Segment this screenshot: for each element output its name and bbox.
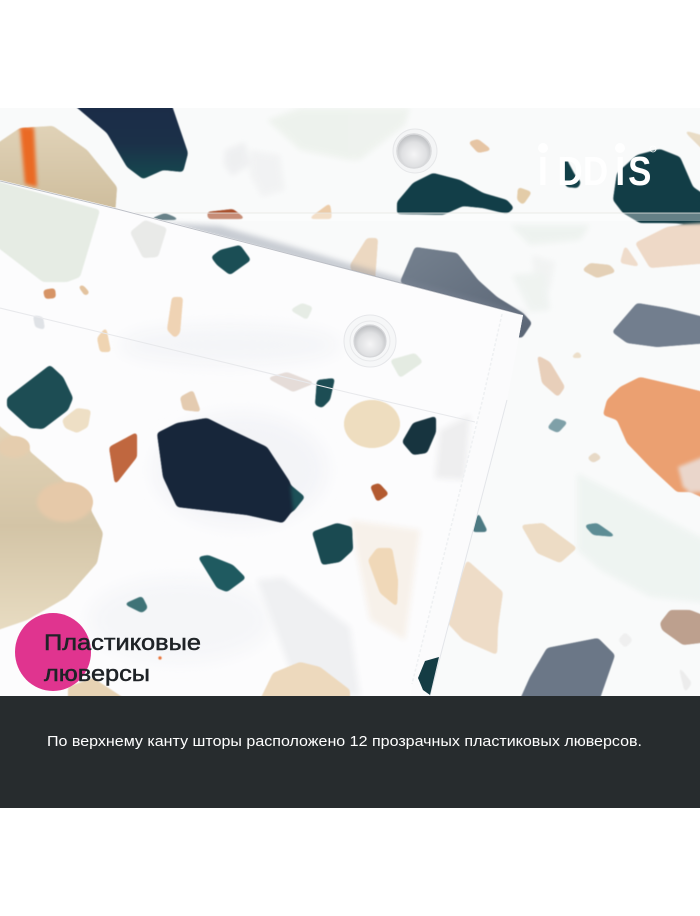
shape: teal lower [198, 555, 246, 592]
shape: grey chip [680, 670, 691, 690]
top hem line [135, 212, 700, 221]
flap: folded curtain corner [0, 180, 523, 704]
shape: round beige [344, 400, 400, 448]
shape: teal behind navy [262, 445, 305, 512]
shape: teal chip [584, 523, 617, 537]
upper layer: terrazzo shapes [0, 100, 700, 704]
shape: slate blob behind corner [400, 247, 532, 338]
shape: teal left blob [7, 365, 73, 429]
shape: peach shard [537, 355, 565, 397]
stitch line on flap [0, 308, 475, 422]
shape: navy chip [402, 416, 436, 455]
shape: grey chip [620, 634, 631, 646]
shape: peach spot [0, 436, 30, 458]
shape: orange large [603, 377, 700, 500]
shape: orange strip [20, 128, 37, 187]
flap: terrazzo shapes [0, 180, 436, 704]
shape: tan chip [469, 139, 490, 153]
shape: teal chip at hem [473, 514, 488, 533]
logo: IDDIS: IDDIS [538, 149, 651, 195]
shape: tan chip top right [686, 131, 700, 148]
shape: teal small [124, 596, 148, 613]
shape: beige big [445, 560, 503, 655]
shape: teal blob upper centre [397, 173, 514, 215]
upper layer: faint background shapes [224, 108, 700, 603]
flap edge line [0, 181, 523, 315]
shape: orange dot [158, 656, 162, 660]
shape: pale teal chip [547, 418, 568, 433]
heading: plastic grommets: Пластиковые [44, 630, 201, 655]
hem on flap side [410, 313, 523, 696]
fold shadow [168, 220, 526, 315]
shape: peach drop [368, 548, 398, 607]
shape: peach shard behind flap [350, 238, 378, 276]
shape: peach spots [37, 482, 93, 522]
shape: navy sliver [153, 213, 177, 221]
shape: pale mint [290, 303, 313, 320]
shape: beige round left [62, 408, 91, 433]
shape: beige leaf [521, 523, 577, 563]
shape: big tan left [0, 420, 103, 632]
shape: rust chip [207, 209, 246, 219]
shape: rust shard [109, 432, 137, 485]
shape: tan long [167, 297, 183, 338]
shape: slate blob bottom [520, 638, 615, 696]
shape: tan chip [180, 390, 201, 412]
shape: teal blob behind logo [564, 162, 581, 189]
shape: tan bottom left [68, 678, 133, 704]
shape: teal blob [211, 245, 251, 275]
shape: teal chip [315, 378, 335, 408]
shape: tiny beige [588, 452, 601, 463]
flap: pale shapes [257, 415, 470, 696]
shape: tan large top left [0, 126, 117, 214]
shape: pale grey [130, 220, 167, 258]
shape: pale mint near grommet [390, 353, 423, 378]
shape: rust tiny [43, 288, 56, 299]
grommet: on flap [344, 315, 396, 367]
grommet: upper [393, 129, 437, 173]
photo: shower curtain fabric [0, 100, 700, 704]
shape: dark teal under fold [273, 252, 320, 268]
shape: rust chip [370, 483, 389, 502]
heading: plastic grommets: люверсы [44, 661, 150, 686]
infographic canvas [0, 108, 700, 808]
shape: teal blob upper right [613, 149, 700, 223]
shape: grey square [33, 315, 45, 330]
shape: teal right [312, 523, 353, 565]
shape: tiny beige [572, 352, 582, 358]
shape: navy blob top [76, 108, 188, 180]
shape: pale patch on orange [678, 455, 700, 492]
shape: tan [97, 327, 111, 352]
flap: soft shadow patches [90, 327, 340, 660]
shape: beige triangle [620, 247, 638, 266]
shape: dark teal at hem [418, 657, 439, 695]
shape: tan bottom centre [258, 662, 350, 704]
shape: taupe blob [660, 610, 700, 645]
shape: beige right [635, 223, 700, 268]
shape: pale green large [0, 180, 100, 282]
shape: slate blob right [612, 303, 700, 347]
pink blob marker [15, 613, 91, 691]
shape: tan tiny [78, 285, 90, 296]
caption band [0, 696, 700, 808]
caption text: По верхнему канту шторы расположено 12 прозрачных пластиковых люверсов. [47, 734, 642, 750]
shape: beige chip [582, 263, 616, 278]
shape: peach chip [311, 204, 332, 220]
shape: tan chip [517, 187, 532, 205]
shape: navy large [157, 418, 293, 523]
shape: pinkish [267, 372, 315, 392]
